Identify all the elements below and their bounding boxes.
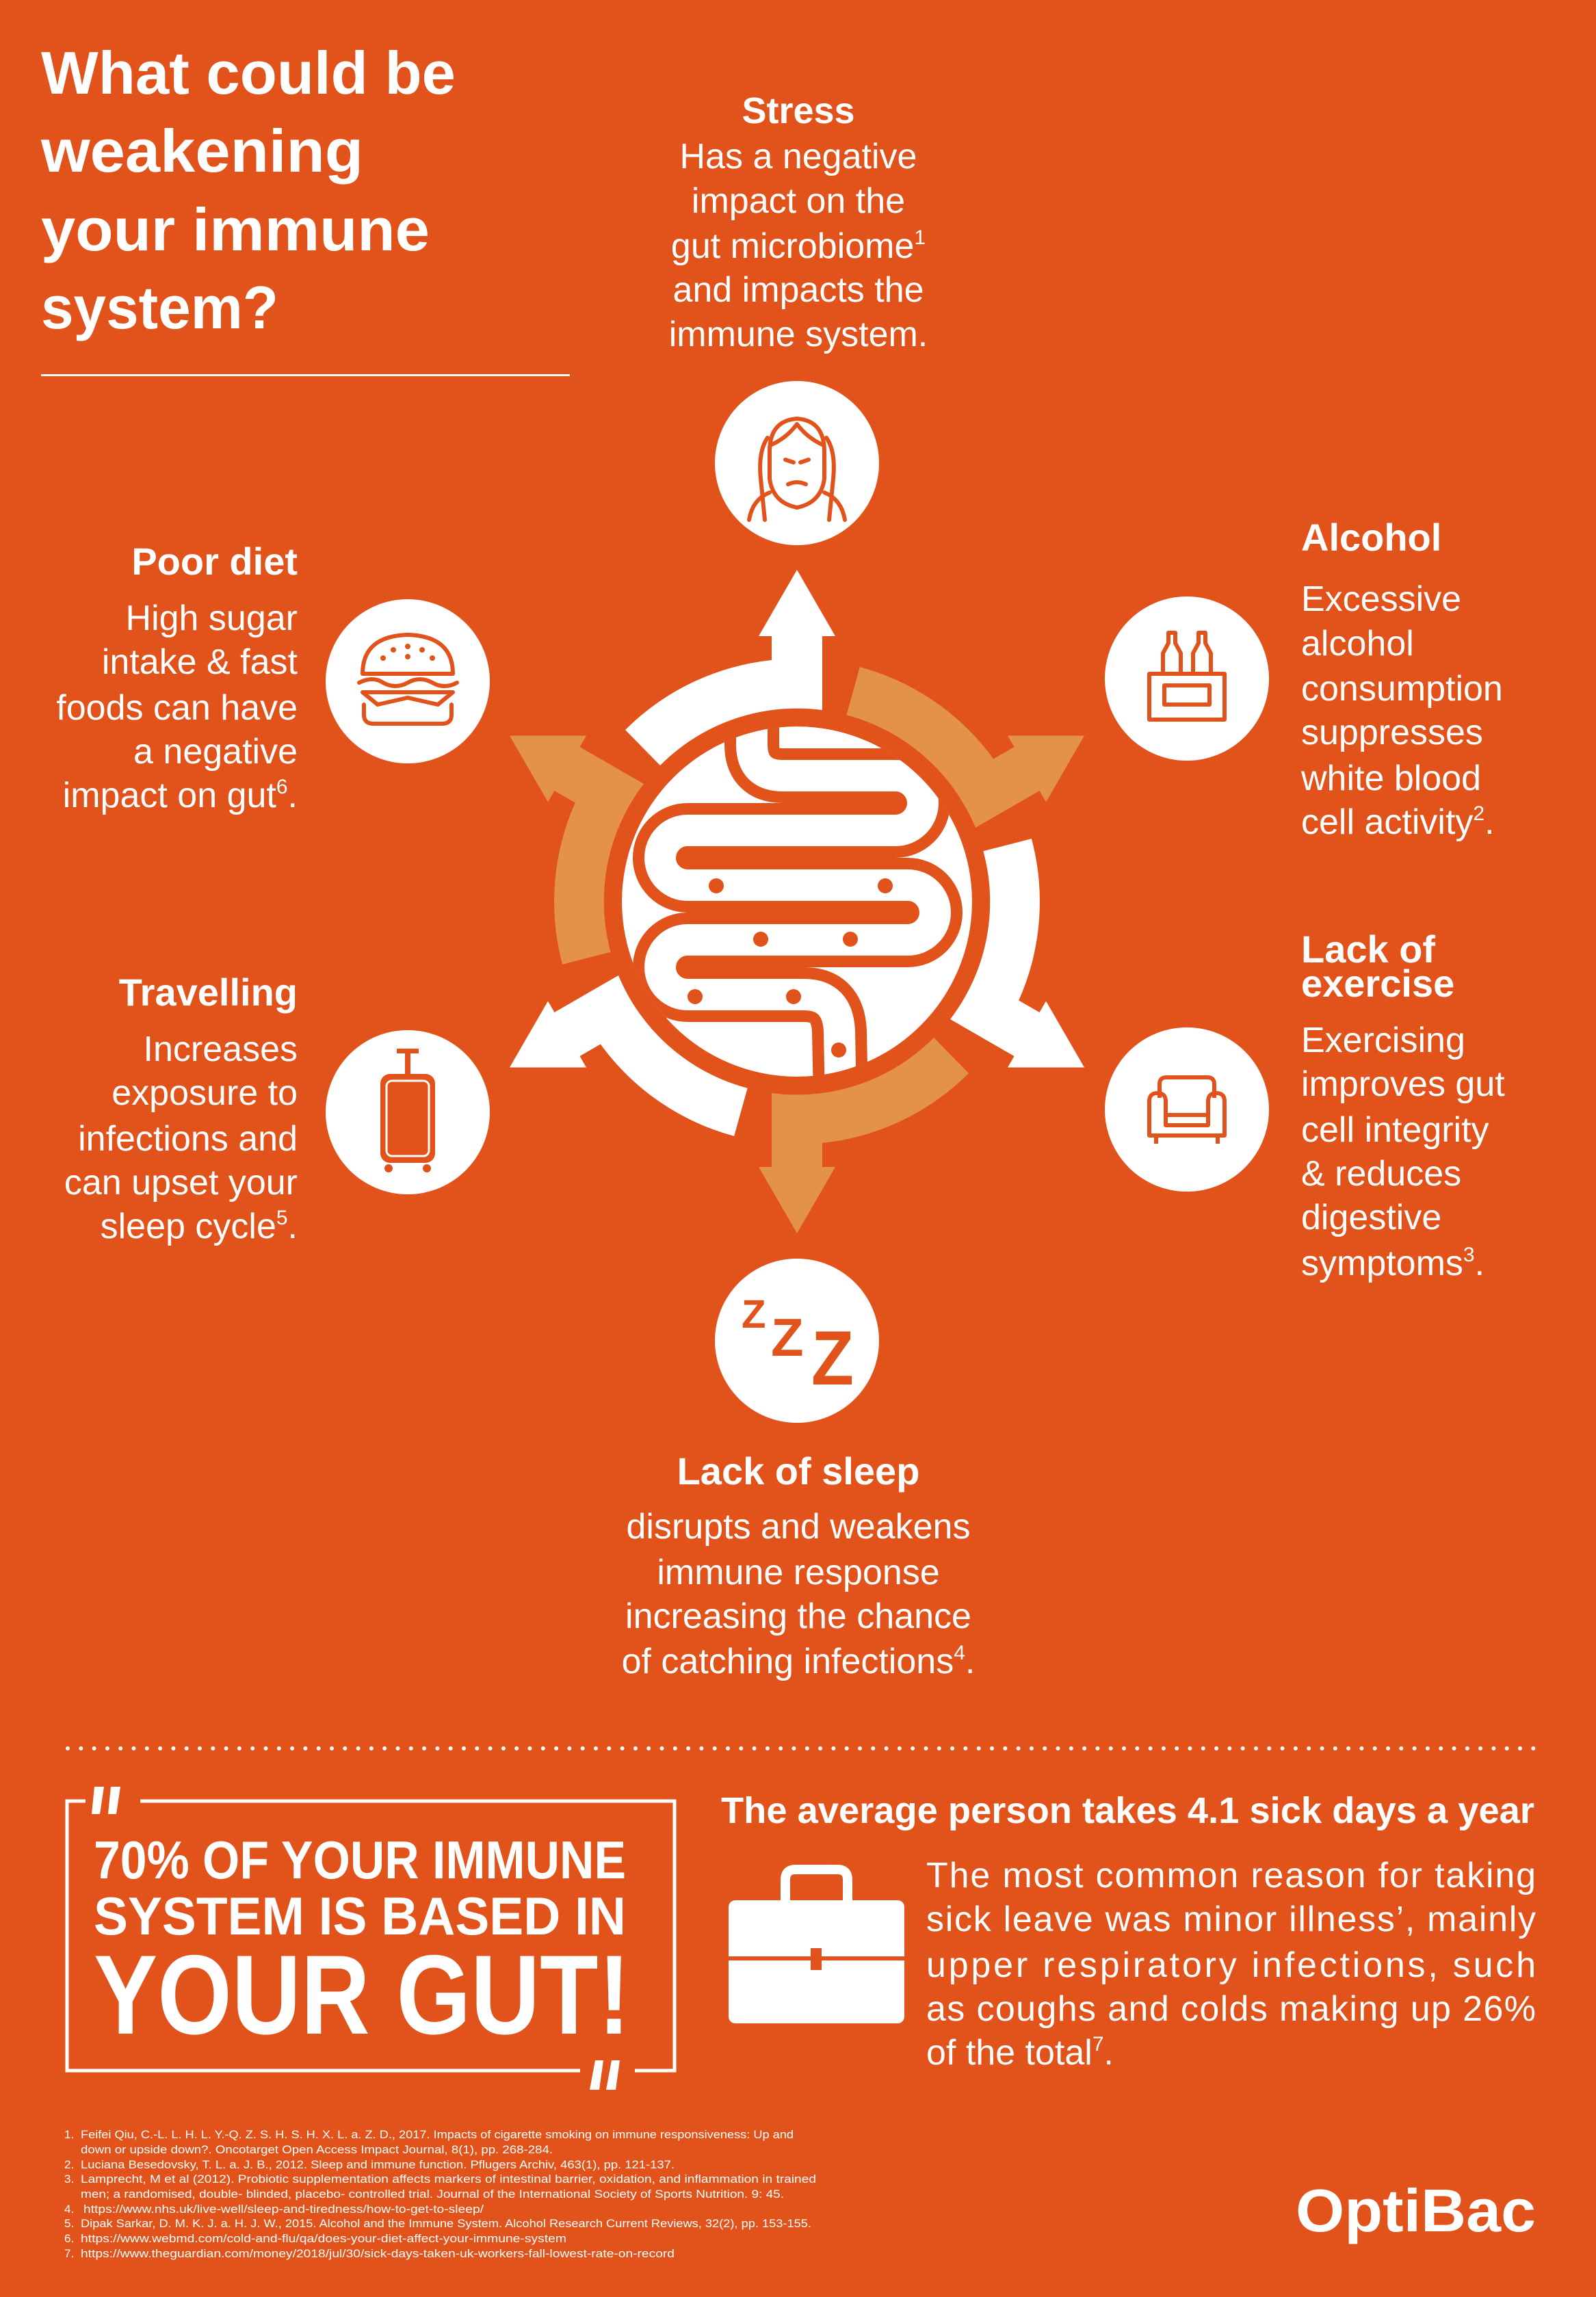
text: travelling: sleep cycle [101, 1207, 276, 1246]
text: sick days body: of the total [926, 2033, 1093, 2073]
text: poor diet: intake & fast [102, 642, 298, 682]
text: travelling: Travelling [119, 971, 298, 1014]
title: system? [41, 274, 278, 341]
footnotes: 3. [64, 2173, 74, 2186]
text: lack of sleep: 4 [954, 1642, 965, 1664]
footnotes: https://www.nhs.uk/live-well/sleep-and-tiredness/how-to-get-to-sleep/ [83, 2203, 484, 2216]
footnotes: Dipak Sarkar, D. M. K. J. a. H. J. W., 2015. Alcohol and the Immune System. Alcohol Research Current Reviews, 32(2), pp. 153-155. [81, 2217, 811, 2230]
footnotes: 5. [64, 2217, 74, 2230]
footnotes: 2. [64, 2158, 74, 2171]
text: stress: and impacts the [672, 270, 924, 310]
text: alcohol: white blood [1300, 759, 1481, 798]
icon: stress [715, 381, 879, 545]
logo: OptiBac [1296, 2177, 1536, 2244]
icon: sofa [1105, 1027, 1269, 1192]
footnotes: 7. [64, 2247, 74, 2260]
footnotes: men; a randomised, double- blinded, placebo- controlled trial. Journal of the International Society of Sports Nutrition. 9: 45. [81, 2188, 784, 2201]
footnotes: Lamprecht, M et al (2012). Probiotic supplementation affects markers of intestinal barrier, oxidation, and inflammation in trained [81, 2173, 816, 2186]
central gut diagram with arrows [510, 570, 1084, 1233]
text: lack of exercise: exercise [1301, 962, 1454, 1005]
text: poor diet: a negative [133, 732, 298, 772]
text: lack of exercise: Exercising [1301, 1021, 1465, 1060]
text: sick days body: as coughs and colds making up 26% [926, 1989, 1536, 2029]
text: lack of sleep: . [965, 1642, 975, 1681]
text: alcohol: cell activity [1301, 802, 1473, 842]
text: poor diet: High sugar [126, 599, 298, 638]
text: alcohol: suppresses [1301, 713, 1483, 752]
footnotes: 4. [64, 2203, 74, 2216]
text: poor diet [56, 540, 298, 815]
text: travelling: can upset your [64, 1163, 298, 1203]
footnotes: down or upside down?. Oncotarget Open Access Impact Journal, 8(1), pp. 268-284. [81, 2143, 553, 2156]
text: alcohol [1300, 516, 1503, 842]
text: lack of sleep: Lack of sleep [677, 1449, 919, 1493]
text: lack of exercise: . [1475, 1244, 1484, 1283]
text: travelling: . [288, 1207, 298, 1246]
footnotes: 1. [64, 2128, 74, 2141]
text: travelling: Increases [144, 1029, 298, 1069]
footnotes: Luciana Besedovsky, T. L. a. J. B., 2012. Sleep and immune function. Pflugers Archiv, 463(1), pp. 121-137. [81, 2158, 675, 2171]
text: sick days body [926, 1856, 1536, 2073]
quote box: YOUR GUT! [94, 1932, 630, 2058]
text: lack of exercise: cell integrity [1301, 1110, 1489, 1150]
text: poor diet: foods can have [56, 688, 298, 728]
icon: sleep zzz: Z [742, 1292, 766, 1337]
text: sick days body: 7 [1093, 2033, 1104, 2056]
text: lack of exercise: symptoms [1301, 1244, 1463, 1283]
text: travelling [64, 971, 298, 1246]
text: sick days body: sick leave was minor illness’, mainly [926, 1900, 1536, 1939]
sick days heading: The average person takes 4.1 sick days a year [721, 1790, 1534, 1831]
text: lack of exercise: & reduces [1301, 1154, 1461, 1194]
text: lack of sleep [622, 1449, 975, 1681]
text: stress: gut microbiome [671, 226, 914, 266]
footnotes: 6. [64, 2232, 74, 2245]
text: sick days body: The most common reason for taking [926, 1856, 1536, 1895]
text: lack of sleep: disrupts and weakens [627, 1507, 970, 1547]
title: your immune [41, 196, 430, 263]
text: poor diet: impact on gut [63, 776, 276, 815]
quote box: SYSTEM IS BASED IN [94, 1886, 626, 1946]
text: stress: impact on the [692, 181, 905, 221]
text: lack of exercise: improves gut [1301, 1064, 1505, 1104]
text: lack of exercise: digestive [1301, 1198, 1441, 1237]
footnotes: https://www.webmd.com/cold-and-flu/qa/does-your-diet-affect-your-immune-system [81, 2232, 566, 2245]
text: stress: 1 [914, 226, 926, 249]
text: lack of exercise [1301, 928, 1505, 1283]
text: travelling: exposure to [112, 1073, 298, 1113]
text: lack of exercise: 3 [1463, 1244, 1475, 1266]
text: alcohol: Excessive [1301, 579, 1461, 619]
text: alcohol: consumption [1301, 669, 1503, 709]
icon: suitcase [326, 1030, 490, 1194]
title: weakening [40, 117, 363, 185]
text: stress [669, 90, 928, 354]
text: poor diet: Poor diet [131, 540, 298, 583]
icon: burger [326, 599, 490, 763]
text: alcohol: . [1484, 802, 1495, 842]
text: travelling: 5 [276, 1207, 288, 1229]
footnotes: Feifei Qiu, C.-L. L. H. L. Y.-Q. Z. S. H. S. H. X. L. a. Z. D., 2017. Impacts of cigarette smoking on immune responsiveness: Up and [81, 2128, 794, 2141]
icon: alcohol [1105, 596, 1269, 761]
title [40, 39, 456, 341]
footnotes [64, 2128, 816, 2260]
text: poor diet: . [288, 776, 298, 815]
text: stress: immune system. [669, 315, 928, 354]
icon: sleep zzz: Z [811, 1315, 854, 1401]
text: lack of sleep: increasing the chance [625, 1597, 971, 1636]
text: stress: Has a negative [680, 137, 917, 176]
text: stress: Stress [742, 90, 855, 131]
quote box: 70% OF YOUR IMMUNE [94, 1830, 626, 1890]
text: sick days body: . [1104, 2033, 1114, 2073]
text: lack of sleep: of catching infections [622, 1642, 954, 1681]
text: alcohol: 2 [1473, 802, 1484, 825]
text: sick days body: upper respiratory infections, such [926, 1945, 1536, 1985]
title: What could be [41, 39, 456, 107]
text: poor diet: 6 [276, 776, 288, 798]
quote box [67, 1787, 675, 2090]
text: travelling: infections and [78, 1119, 298, 1159]
icon: briefcase [729, 1869, 904, 2023]
text: lack of exercise: Lack of [1301, 928, 1435, 971]
text: alcohol: alcohol [1301, 624, 1414, 664]
icon: sleep zzz [715, 1259, 879, 1423]
text: lack of sleep: immune response [657, 1553, 940, 1592]
footnotes: https://www.theguardian.com/money/2018/jul/30/sick-days-taken-uk-workers-fall-lowest-rate-on-record [81, 2247, 675, 2260]
text: alcohol: Alcohol [1301, 516, 1441, 559]
icon: sleep zzz: Z [771, 1307, 804, 1367]
